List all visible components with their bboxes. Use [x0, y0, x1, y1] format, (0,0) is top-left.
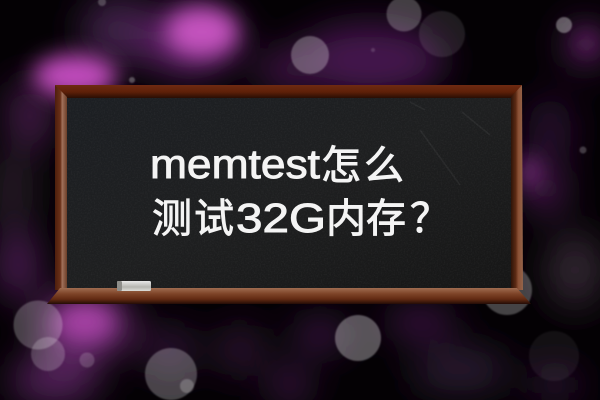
frame: bottom ledge — [47, 288, 531, 304]
title text: 32G — [236, 195, 326, 241]
frame: top rail — [55, 85, 522, 99]
title text — [150, 141, 450, 241]
title text: memtest — [150, 141, 321, 187]
frame: left rail — [55, 85, 67, 290]
title text: 怎么 — [321, 144, 404, 188]
title text: 内存？ — [326, 197, 450, 241]
frame: right rail — [511, 85, 523, 290]
board surface — [67, 98, 511, 288]
chalk stick — [117, 281, 151, 291]
chalkboard frame — [47, 85, 531, 304]
title text: 测试 — [152, 197, 234, 241]
